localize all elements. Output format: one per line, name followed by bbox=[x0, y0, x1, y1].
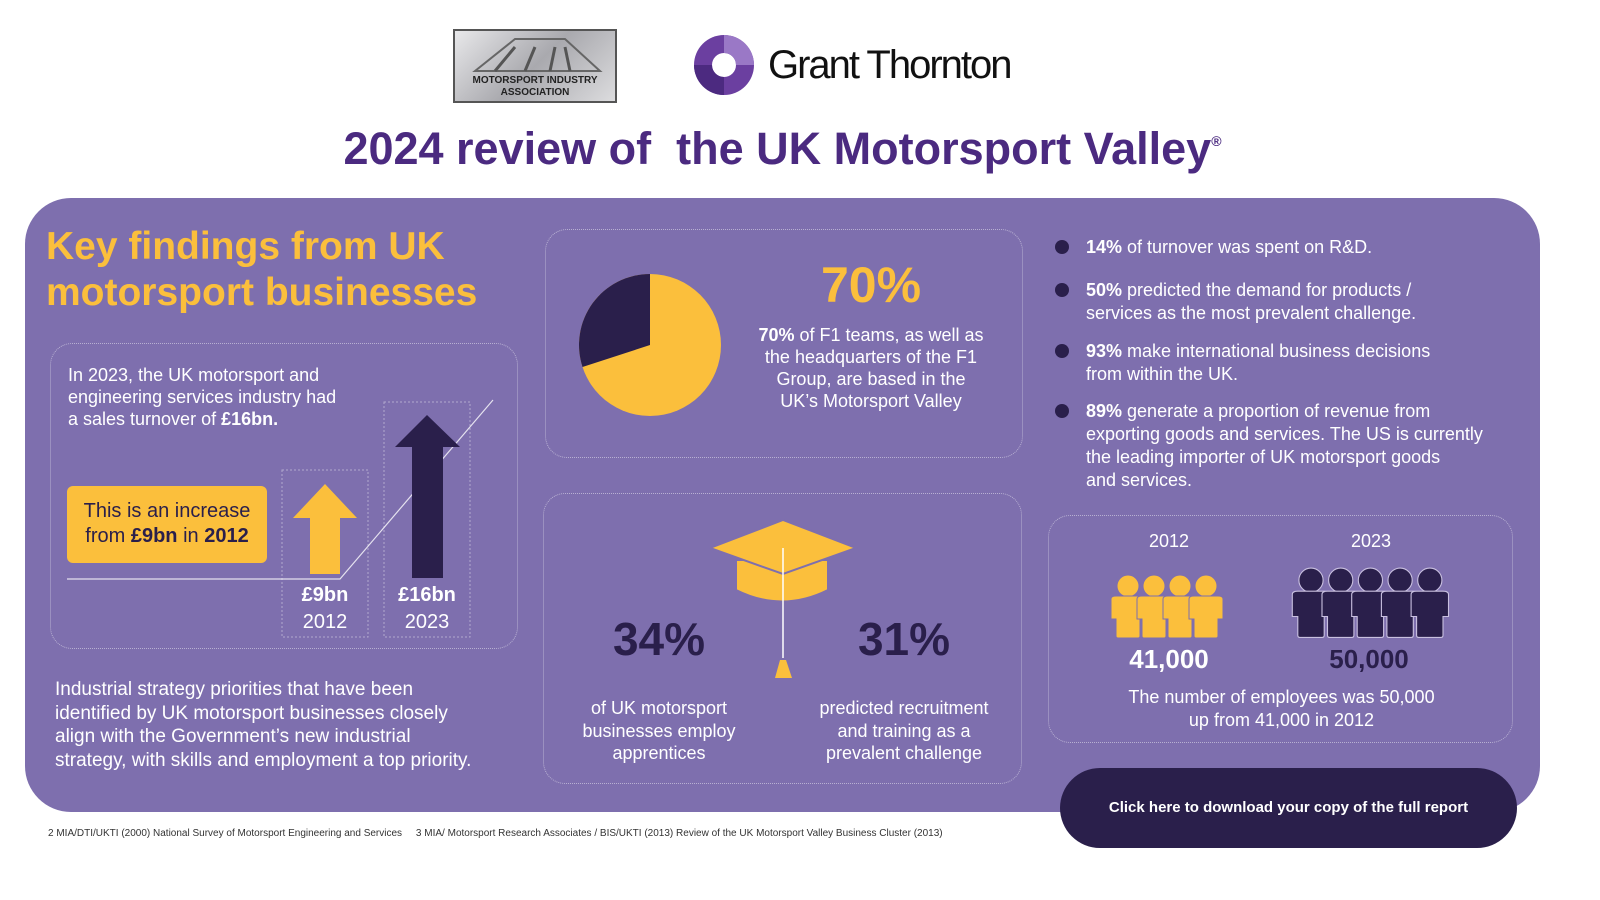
text: turnover: a sales turnover of £16bn. bbox=[68, 409, 278, 429]
text: employees: The number of employees was 50,000 bbox=[1128, 687, 1435, 707]
chart: arrows: 2012 bbox=[303, 611, 347, 633]
text: F1 teams bbox=[758, 325, 984, 411]
title: 2024 review of the UK Motorsport Valley® bbox=[343, 123, 1222, 174]
button: download: Click here to download your copy of the full report bbox=[1109, 799, 1468, 816]
callout: increase: from £9bn in 2012 bbox=[85, 525, 249, 547]
stat: 70%: 70% bbox=[821, 257, 921, 313]
icon: graduation cap bbox=[712, 521, 854, 678]
list: key stats bbox=[1055, 237, 1483, 490]
logo: Motorsport Industry Association bbox=[453, 29, 617, 103]
heading: key findings: Key findings from UK bbox=[46, 225, 445, 268]
callout: increase: This is an increase bbox=[84, 500, 250, 522]
chart: arrows: 2023 bbox=[405, 611, 449, 633]
text: employees bbox=[1128, 687, 1435, 730]
stat: 34%: 34% bbox=[613, 613, 705, 665]
text: employees: up from 41,000 in 2012 bbox=[1189, 710, 1374, 730]
text: exporting goods and services. The US is currently bbox=[1086, 424, 1483, 444]
text: services as the most prevalent challenge. bbox=[1086, 303, 1416, 323]
panel: employees: 2023 bbox=[1351, 531, 1391, 551]
text: recruitment: predicted recruitment and training as a prevalent challenge bbox=[819, 698, 989, 763]
stat: 41,000: 41,000 bbox=[1129, 644, 1209, 674]
icon: people 2023 bbox=[1292, 568, 1449, 638]
text: 50% predicted the demand for products / bbox=[1086, 280, 1411, 300]
footnotes: 2 MIA/DTI/UKTI (2000) National Survey of Motorsport Engineering and Services 3 MIA/ Motorsport Research Associates / BIS/UKTI (2013) Review of the UK Motorsport Valley Business Cluster (2013) bbox=[48, 828, 943, 839]
panel: apprentices bbox=[543, 493, 1022, 784]
heading: key findings: motorsport businesses bbox=[46, 271, 477, 314]
button: download bbox=[1060, 768, 1517, 848]
text: industrial strategy: Industrial strategy priorities that have been bbox=[55, 679, 413, 700]
logo: Motorsport Industry Association: MOTORSPORT INDUSTRY bbox=[472, 75, 598, 86]
chart: arrows: £9bn bbox=[302, 584, 348, 606]
panel: employees bbox=[1048, 515, 1513, 743]
stat: 50,000: 50,000 bbox=[1329, 644, 1409, 674]
text: industrial strategy: align with the Government’s new industrial bbox=[55, 726, 411, 747]
logo: Grant Thornton bbox=[694, 35, 1011, 95]
text: turnover: In 2023, the UK motorsport and bbox=[68, 365, 319, 385]
text: industrial strategy: identified by UK motorsport businesses closely bbox=[55, 702, 448, 724]
text: turnover: engineering services industry had bbox=[68, 387, 336, 407]
callout: increase bbox=[67, 486, 267, 563]
icon: people 2012 bbox=[1112, 576, 1222, 638]
panel: turnover chart bbox=[50, 343, 518, 649]
text: apprentices: of UK motorsport businesses employ apprentices bbox=[582, 698, 736, 763]
text: 93% make international business decisions bbox=[1086, 341, 1430, 361]
text: and services. bbox=[1086, 470, 1192, 490]
text: F1 teams: UK’s Motorsport Valley bbox=[780, 391, 962, 411]
text: 14% of turnover was spent on R&D. bbox=[1086, 237, 1372, 257]
main panel bbox=[25, 198, 1540, 812]
logo: Motorsport Industry Association: ASSOCIATION bbox=[501, 87, 569, 98]
stat: 31%: 31% bbox=[858, 613, 950, 665]
panel: F1 teams pie bbox=[545, 229, 1023, 458]
text: industrial strategy bbox=[55, 679, 471, 770]
pie chart bbox=[579, 274, 721, 416]
text: 89% generate a proportion of revenue from bbox=[1086, 401, 1430, 421]
logo: Grant Thornton: Grant Thornton bbox=[768, 43, 1011, 87]
chart: arrows bbox=[67, 400, 494, 638]
text: the leading importer of UK motorsport goods bbox=[1086, 447, 1440, 467]
chart: arrows: £16bn bbox=[398, 584, 456, 606]
text: turnover bbox=[68, 365, 336, 429]
text: F1 teams: 70% of F1 teams, as well as the headquarters of the F1 bbox=[758, 325, 984, 367]
heading: key findings bbox=[46, 225, 477, 314]
text: from within the UK. bbox=[1086, 364, 1238, 384]
text: F1 teams: Group, are based in the bbox=[776, 369, 966, 389]
year labels: 2012 bbox=[1149, 531, 1189, 551]
text: industrial strategy: strategy, with skills and employment a top priority. bbox=[55, 750, 471, 770]
